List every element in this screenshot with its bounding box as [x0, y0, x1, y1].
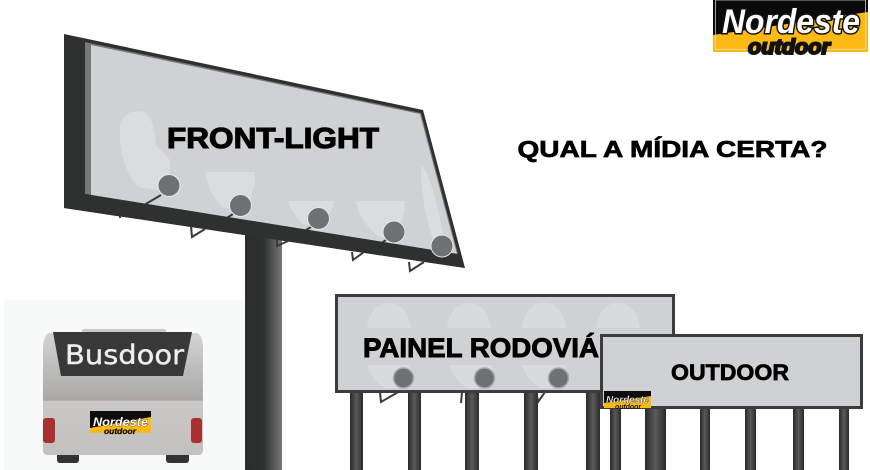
light glows [120, 111, 447, 250]
logo: nordeste outdoor: outdoor [748, 36, 832, 59]
title: QUAL A MÍDIA CERTA? [518, 135, 828, 162]
panel: outdoor [602, 336, 862, 408]
tail lights [43, 418, 55, 443]
panel: painel rodoviário [336, 296, 674, 403]
heading: painel rodoviário: PAINEL RODOVIÁ [363, 333, 599, 363]
light glows [367, 303, 640, 388]
lower frame shade [64, 194, 465, 268]
window panel [53, 332, 192, 376]
logo: small nordeste on bus: outdoor [104, 427, 137, 436]
logo: small nordeste on bus [90, 411, 151, 436]
bus label: Busdoor [65, 340, 185, 371]
panel: front-light billboard [64, 34, 465, 271]
posts: painel rodoviário [350, 392, 600, 470]
lamps [158, 174, 453, 257]
logo: small nordeste on outdoor [604, 391, 651, 411]
heading: outdoor: OUTDOOR [671, 360, 789, 385]
bus body [43, 333, 203, 455]
wheels [57, 450, 79, 463]
icon: bus [43, 329, 203, 463]
brackets [120, 216, 424, 271]
brackets [380, 391, 545, 403]
posts: outdoor [610, 409, 849, 470]
lamps [394, 368, 568, 388]
logo: small nordeste on outdoor: outdoor [615, 404, 642, 411]
logo: nordeste outdoor [713, 0, 868, 59]
logo: nordeste outdoor: Nordeste [722, 3, 860, 41]
logo: small nordeste on outdoor: Nordeste [606, 395, 649, 406]
lamp arms [139, 195, 386, 244]
pole: front-light [245, 225, 282, 470]
panel: busdoor background [4, 300, 243, 470]
heading: front-light: FRONT-LIGHT [167, 123, 379, 155]
logo: small nordeste on bus: Nordeste [93, 415, 148, 429]
